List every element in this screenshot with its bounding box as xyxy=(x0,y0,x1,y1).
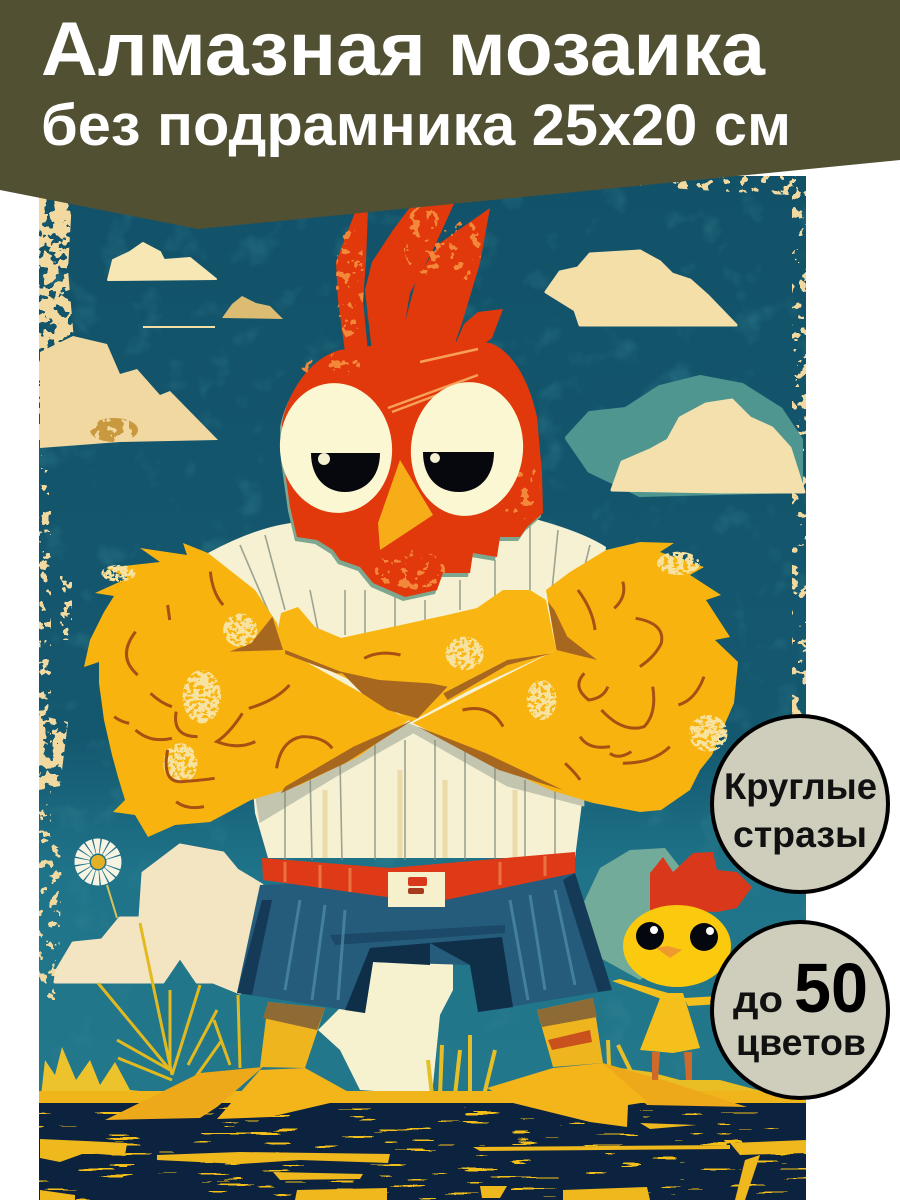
cloud: lower left xyxy=(55,845,262,993)
cloud: behind chick xyxy=(582,848,700,980)
left pupil xyxy=(311,453,380,492)
badge: up to 50 colours: до xyxy=(733,979,783,1020)
rooster feet xyxy=(105,1063,747,1127)
worn edges of the poster xyxy=(39,176,806,1000)
chick legs xyxy=(652,1052,692,1080)
chick eyes xyxy=(636,922,718,951)
cloud: right teal backing xyxy=(568,378,800,494)
cloud: top left xyxy=(108,243,216,280)
right pupil xyxy=(423,452,494,492)
chick head xyxy=(623,905,731,987)
badge: round rhinestones xyxy=(712,716,888,892)
header banner xyxy=(0,0,900,229)
rooster comb xyxy=(336,197,503,352)
chick xyxy=(612,852,752,1080)
head highlight strokes xyxy=(388,349,478,412)
badge: up to 50 colours: цветов xyxy=(736,1022,866,1063)
cloud: left ochre patch xyxy=(90,418,138,442)
badge: round rhinestones: стразы xyxy=(733,814,867,855)
grass xyxy=(40,923,806,1105)
right eye xyxy=(404,377,530,521)
shirt xyxy=(208,515,606,860)
cloud: small xyxy=(222,296,283,319)
shadow under arms xyxy=(255,723,584,823)
cream shape between the legs xyxy=(318,955,453,1095)
badge: up to 50 colours: 50 xyxy=(794,949,868,1027)
sky background xyxy=(39,176,806,1200)
comb and head mottling xyxy=(300,205,540,590)
chick arms xyxy=(612,979,720,1006)
cloud: top right xyxy=(546,251,736,325)
badge: up to 50 colours xyxy=(712,922,888,1098)
title: Алмазная мозаика xyxy=(41,7,766,92)
chick comb xyxy=(650,852,752,912)
subtitle: без подрамника 25х20 см xyxy=(41,93,791,158)
cloud: left xyxy=(40,336,218,448)
cloud: right cream xyxy=(612,400,804,492)
left arm mass xyxy=(84,543,409,837)
badge: round rhinestones: Круглые xyxy=(724,766,877,807)
streak under top-left cloud xyxy=(143,326,215,328)
arm shading, highlights and feather marks xyxy=(101,552,728,808)
artwork: rooster poster xyxy=(39,176,806,1200)
belt xyxy=(262,852,575,907)
chick dress xyxy=(640,993,700,1053)
rooster head shadow xyxy=(280,346,541,601)
ground streaks xyxy=(40,1123,806,1200)
rooster legs xyxy=(260,998,603,1068)
chick beak xyxy=(656,946,682,958)
beak xyxy=(378,460,433,550)
rooster head xyxy=(282,342,543,597)
right arm mass xyxy=(413,542,738,812)
daisy xyxy=(82,846,117,918)
shorts xyxy=(237,873,612,1013)
left eye xyxy=(274,378,398,518)
crossed forearms with hands xyxy=(277,590,556,722)
ground xyxy=(39,1091,806,1200)
